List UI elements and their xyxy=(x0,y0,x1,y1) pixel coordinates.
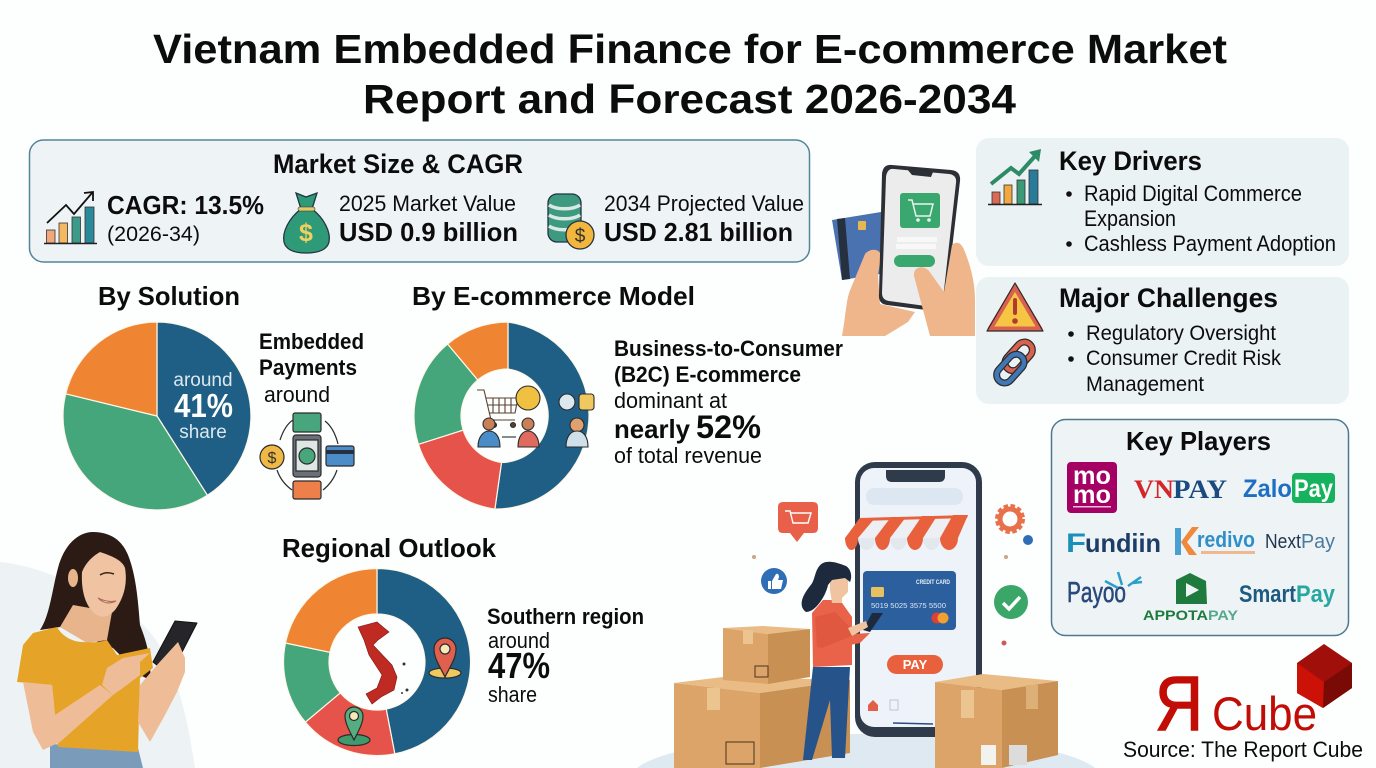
logo: Kredivo: redivo xyxy=(1197,527,1255,552)
logo: momo: mo xyxy=(1073,462,1111,490)
logo: ZaloPay xyxy=(1243,473,1335,503)
label: B2C share xyxy=(614,336,843,468)
logo: AppotaPay: APPOTA xyxy=(1143,607,1208,623)
logo: VNPAY xyxy=(1134,475,1227,504)
label: southern region share: 47% xyxy=(488,645,550,686)
icon: warning triangle xyxy=(987,283,1043,331)
platform xyxy=(637,734,1095,768)
title: Vietnam Embedded Finance for E-commerce Market xyxy=(153,26,1227,72)
illustration: hands holding phone and card xyxy=(832,165,975,336)
icon: payment methods: $ xyxy=(268,450,277,467)
credit card xyxy=(863,571,956,630)
label: B2C share: dominant at xyxy=(614,388,727,413)
shopper woman xyxy=(802,562,883,760)
icon: payment methods xyxy=(260,413,354,499)
challenge list: Regulatory Oversight xyxy=(1086,322,1276,345)
icon: check mark xyxy=(994,585,1028,619)
logo: Fundiin: undiin xyxy=(1085,528,1161,558)
pie label: 41 percent share: share xyxy=(179,422,227,443)
label: B2C share: of total revenue xyxy=(614,443,762,468)
pie label: 41 percent share xyxy=(173,370,233,443)
logo: Fundiin: F xyxy=(1066,528,1086,558)
challenge list: Management xyxy=(1086,373,1204,396)
label: southern region share: share xyxy=(488,682,537,707)
panel: key players xyxy=(1052,420,1348,636)
2025 value: USD 0.9 billion xyxy=(339,217,518,247)
heading: key drivers: Key Drivers xyxy=(1059,146,1202,176)
challenge list xyxy=(1068,322,1281,396)
label: southern region share: around xyxy=(488,628,550,653)
credit card: 5019 5025 3575 5500 xyxy=(871,603,946,610)
panel: key drivers xyxy=(976,138,1349,266)
logo: momo xyxy=(1067,462,1117,513)
title: Report and Forecast 2026-2034 xyxy=(363,76,1016,122)
chart: by solution pie xyxy=(63,322,251,510)
driver list: Expansion xyxy=(1084,206,1176,231)
logo: ZaloPay: Pay xyxy=(1294,475,1333,503)
store awning xyxy=(845,515,968,550)
heading: by solution: By Solution xyxy=(98,281,240,311)
label: embedded payments: Payments xyxy=(259,355,357,380)
label: embedded payments xyxy=(259,329,364,407)
logo: RCube xyxy=(1155,644,1352,747)
illustration: woman with smartphone xyxy=(17,532,197,768)
source line: Source: The Report Cube xyxy=(1123,737,1363,762)
logo: Payoo: Payoo xyxy=(1067,577,1126,609)
logo: AppotaPay: PAY xyxy=(1208,607,1239,623)
label: southern region share xyxy=(487,604,644,707)
cardboard boxes xyxy=(674,626,1058,768)
icon: northern location pin xyxy=(338,707,370,746)
icon: gear xyxy=(996,506,1024,532)
pie label: 41 percent share: around xyxy=(173,370,233,391)
challenge list: Consumer Credit Risk xyxy=(1086,347,1281,370)
icon: coin stack: $ xyxy=(575,226,586,247)
panel: market size and CAGR xyxy=(30,140,810,262)
pay button: PAY xyxy=(903,657,928,672)
label: embedded payments: around xyxy=(264,382,330,407)
label: embedded payments: Embedded xyxy=(259,329,364,354)
pay button xyxy=(887,655,943,674)
driver list xyxy=(1066,181,1336,256)
label: B2C share: (B2C) E-commerce xyxy=(614,362,801,387)
icon: rising bars xyxy=(988,149,1042,204)
CAGR period: (2026-34) xyxy=(107,223,200,246)
heading: regional outlook: Regional Outlook xyxy=(282,533,497,563)
logo: momo: mo xyxy=(1073,481,1111,509)
logo: NextPay: Pay xyxy=(1301,531,1335,553)
CAGR value: CAGR: 13.5% xyxy=(107,190,264,220)
icon: growth chart xyxy=(44,192,97,244)
chart: e-commerce model donut xyxy=(414,322,589,509)
icon: broken chain xyxy=(993,339,1036,386)
heading: key players: Key Players xyxy=(1126,426,1271,456)
2025 label: 2025 Market Value xyxy=(339,191,516,216)
icon: thumbs up xyxy=(761,568,787,594)
logo: NextPay: Next xyxy=(1265,531,1301,553)
logo: RCube: Я xyxy=(1155,661,1203,747)
illustration: online shopping scene xyxy=(637,462,1095,768)
heading: market size: Market Size & CAGR xyxy=(273,149,523,179)
logo: SmartPay: Smart xyxy=(1239,581,1296,608)
icon: cart bubble xyxy=(778,502,818,542)
icon: coin stack xyxy=(548,194,594,249)
icon: money bag: $ xyxy=(299,219,313,247)
2034 value: USD 2.81 billion xyxy=(604,217,793,247)
label: B2C share: Business-to-Consumer xyxy=(614,336,843,361)
logo: SmartPay: Pay xyxy=(1296,581,1336,608)
icon: customers on blue xyxy=(559,394,594,447)
2034 label: 2034 Projected Value xyxy=(604,191,804,216)
driver list: Cashless Payment Adoption xyxy=(1084,231,1336,256)
large phone with storefront xyxy=(845,462,982,737)
logo: VNPAY: VN xyxy=(1134,475,1174,504)
title xyxy=(153,26,1227,122)
credit card: CREDIT CARD xyxy=(916,579,950,586)
label: southern region share: Southern region xyxy=(487,604,644,629)
label: B2C share: nearly xyxy=(614,414,691,444)
logo: NextPay xyxy=(1265,531,1335,553)
logo: Kredivo xyxy=(1175,527,1255,555)
heading: by e-commerce model: By E-commerce Model xyxy=(412,281,695,311)
panel: major challenges xyxy=(976,277,1349,404)
icon: Vietnam map xyxy=(358,622,408,704)
icon: southern location pin xyxy=(429,638,461,678)
heading: major challenges: Major Challenges xyxy=(1059,283,1278,313)
icon: shopping cart and shoppers xyxy=(477,386,540,447)
logo: RCube: Cube xyxy=(1212,687,1317,740)
label: B2C share: 52% xyxy=(696,409,761,445)
logo: AppotaPay xyxy=(1143,573,1239,623)
icon: money bag xyxy=(284,193,329,253)
pie label: 41 percent share: 41% xyxy=(174,387,233,424)
logo: VNPAY: PAY xyxy=(1173,475,1227,504)
logo: ZaloPay: Zalo xyxy=(1243,475,1292,503)
driver list: Rapid Digital Commerce xyxy=(1084,181,1302,206)
chart: regional donut xyxy=(284,568,471,756)
